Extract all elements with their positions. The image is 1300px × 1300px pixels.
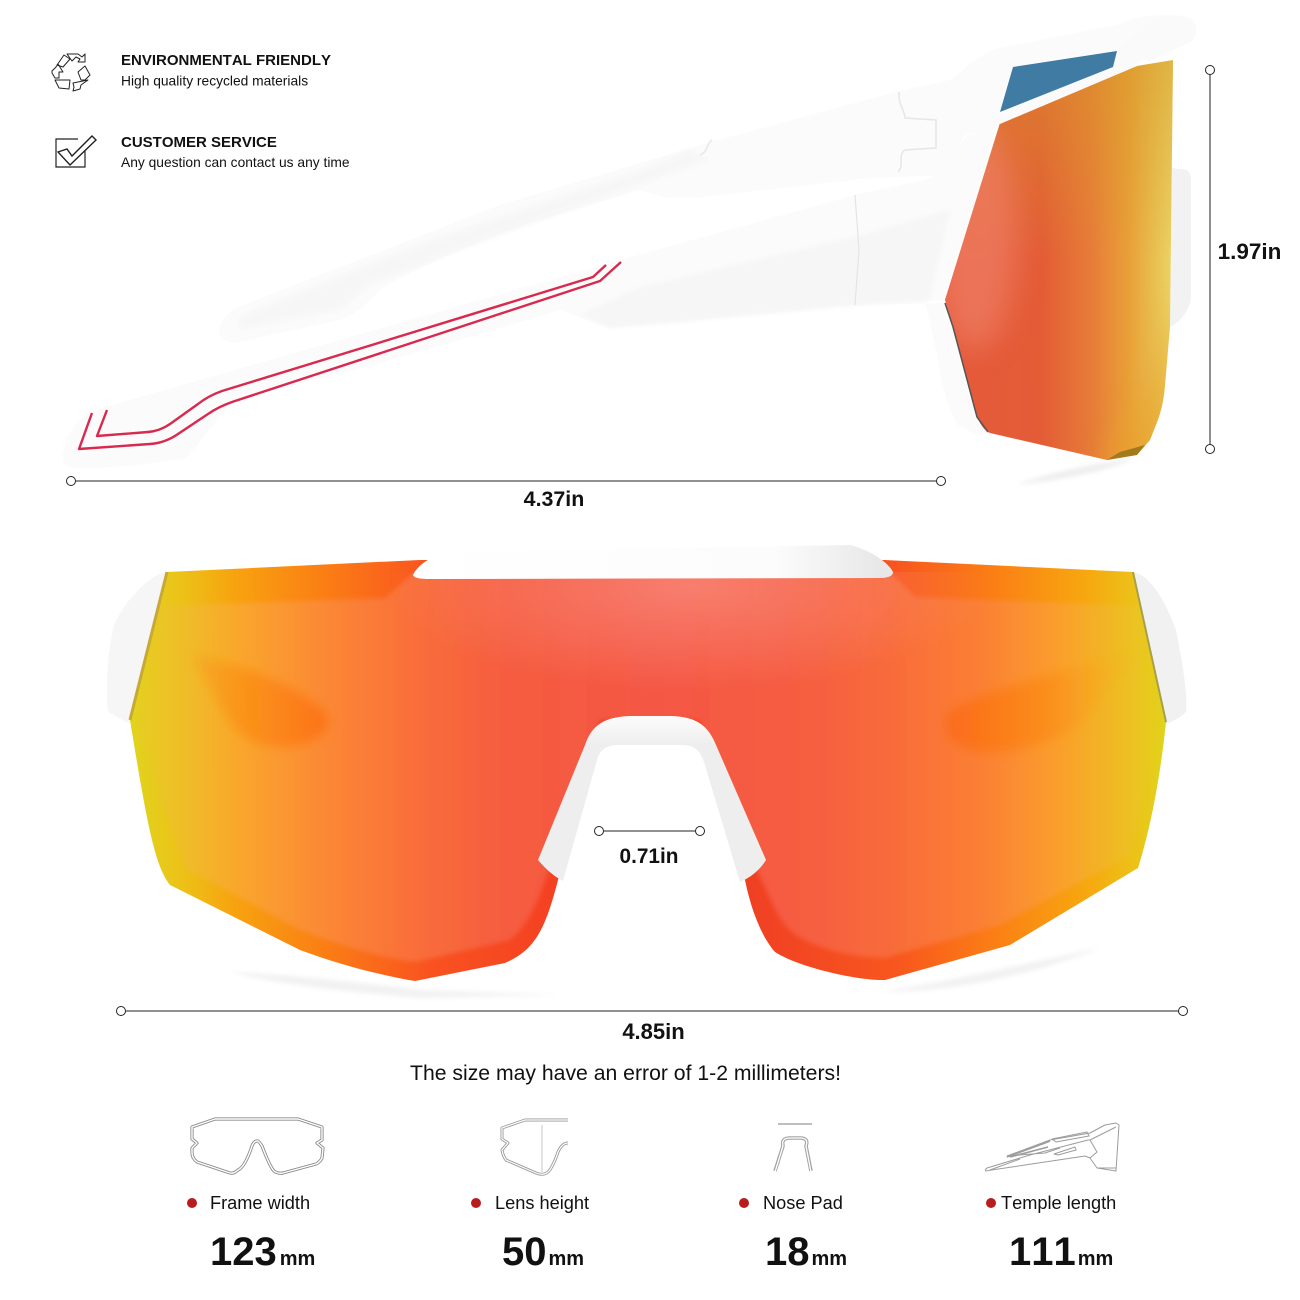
near arm shading (580, 195, 950, 328)
nose piece (538, 716, 766, 882)
lens inner panel (135, 572, 1160, 962)
note: size error: The size may have an error of 1-2 millimeters! (410, 1062, 841, 1085)
dimension: length 4.37in (66, 476, 946, 511)
value: 111mm (1009, 1230, 1113, 1274)
bullet (739, 1198, 749, 1208)
brow piece (985, 15, 1196, 127)
side lens (933, 60, 1175, 470)
dimension: nose 0.71in (594, 826, 704, 868)
text: environmental friendly: High quality recycled materials (121, 74, 308, 88)
label: Temple length (1001, 1193, 1116, 1213)
far arm hinge (700, 92, 936, 172)
icon: check box (56, 136, 96, 167)
label: Frame width (210, 1193, 310, 1213)
text: environmental friendly (121, 52, 331, 88)
text: customer service (121, 134, 350, 170)
spec: frame width (187, 1119, 323, 1274)
far temple arm (219, 15, 1196, 342)
bullet (187, 1198, 197, 1208)
ground shadow (1015, 458, 1135, 485)
top highlight (442, 572, 953, 672)
nose pad side (1170, 168, 1191, 327)
text: customer service: Any question can contact us any time (121, 155, 350, 170)
label: Nose Pad (763, 1193, 843, 1213)
icon: temple (985, 1123, 1119, 1171)
dimension: height 1.97in: 1.97in (1218, 239, 1281, 264)
text: environmental friendly: ENVIRONMENTAL FRIENDLY (121, 52, 331, 69)
icon: frame (192, 1119, 323, 1173)
value: 50mm (502, 1230, 584, 1274)
ground shadow (230, 948, 1100, 998)
panel: features (52, 52, 350, 170)
bullet (986, 1198, 996, 1208)
text: customer service: CUSTOMER SERVICE (121, 134, 277, 151)
dimension: width 4.85in: 4.85in (622, 1019, 685, 1044)
icon: recycle (52, 54, 90, 91)
near temple arm (63, 124, 1010, 468)
label: Lens height (495, 1193, 589, 1213)
icon: lens (502, 1120, 568, 1174)
dimension: nose 0.71in: 0.71in (620, 845, 678, 868)
icon: nose pad (775, 1124, 812, 1172)
red stripes (79, 262, 621, 449)
spec: lens height (471, 1120, 589, 1274)
bullet (471, 1198, 481, 1208)
value: 123mm (210, 1230, 315, 1274)
spec: nose pad (739, 1124, 847, 1274)
dimension: length 4.37in: 4.37in (524, 487, 584, 511)
dimension: width 4.85in (116, 1006, 1188, 1044)
spec: temple length (985, 1123, 1119, 1274)
value: 18mm (765, 1230, 847, 1274)
lens (130, 560, 1166, 981)
blue inner lens (1000, 51, 1117, 112)
right streak (942, 662, 1093, 756)
panel: side view glasses (63, 15, 1196, 485)
panel: front view glasses (107, 545, 1186, 998)
left streak (190, 655, 328, 747)
dimension: height 1.97in (1206, 66, 1281, 454)
left ear piece (107, 572, 165, 724)
bridge (413, 545, 893, 579)
right ear piece (1133, 572, 1186, 724)
